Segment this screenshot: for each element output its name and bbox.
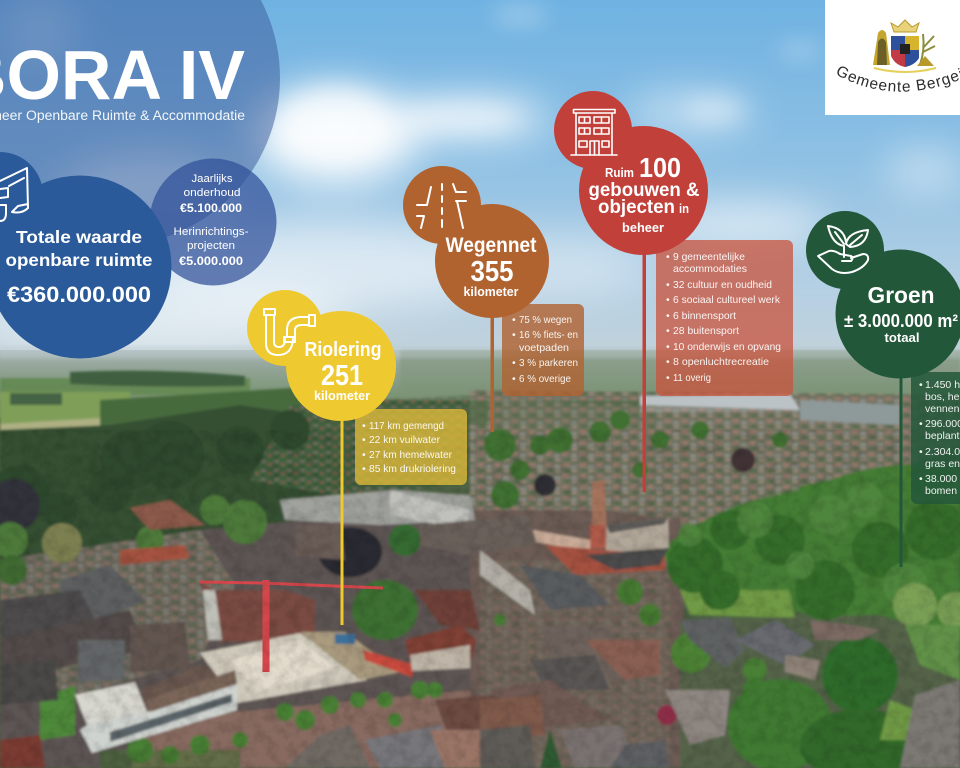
panel: gebouwen: [554, 91, 793, 492]
details box: 8 openluchtrecreatie: [673, 356, 769, 368]
panel: wegennet: kilometer: [464, 285, 519, 299]
details box: •: [362, 420, 366, 432]
panel: total value: €360.000.000: [7, 282, 151, 307]
details box: 11 overig: [673, 372, 711, 384]
details box: 28 buitensport: [673, 325, 739, 337]
details box: 6 sociaal cultureel werk: [673, 294, 781, 306]
details box: •: [919, 379, 923, 391]
details box: •: [919, 473, 923, 485]
panel: title: [0, 0, 280, 246]
buildings: [0, 480, 960, 768]
details box: 85 km drukriolering: [369, 463, 456, 475]
panel: yearly budgets: projecten: [187, 240, 235, 252]
pin line: [642, 250, 646, 492]
panel: wegennet: 355: [470, 256, 514, 288]
panel: wegennet: [403, 166, 584, 432]
icon: road: [417, 184, 466, 228]
pin line: [490, 310, 494, 432]
panel: total value: openbare ruimte: [6, 250, 153, 270]
panel: yearly budgets: €5.100.000: [180, 203, 242, 215]
tree masses: [0, 410, 960, 768]
details box: [355, 409, 467, 485]
panel: total value: [0, 152, 172, 358]
details box: •: [362, 434, 366, 446]
crest: [873, 20, 936, 72]
details box: 6 % overige: [519, 373, 571, 385]
panel: yearly budgets: €5.000.000: [179, 256, 243, 268]
panel: gebouwen: in: [679, 202, 689, 216]
details box: •: [666, 251, 670, 263]
panel: riolering: 251: [321, 360, 363, 392]
details box: [502, 304, 584, 396]
details box: •: [362, 463, 366, 475]
panel: gebouwen: gebouwen &: [588, 179, 700, 201]
panel: riolering: kilometer: [314, 389, 370, 403]
details box: •: [512, 373, 516, 385]
panel: gebouwen: objecten: [598, 196, 675, 218]
details box: bomen: [925, 485, 957, 497]
panel: wegennet: Wegennet: [446, 234, 536, 257]
panel: groen: totaal: [884, 331, 920, 345]
town roof texture: [0, 400, 800, 768]
panel: total value: Totale waarde: [16, 227, 142, 247]
details box: •: [666, 372, 670, 384]
panel: riolering: Riolering: [304, 339, 382, 361]
details box: [911, 372, 960, 504]
details box: 117 km gemengd: [369, 420, 444, 432]
details box: 10 onderwijs en opvang: [673, 341, 781, 353]
panel: yearly budgets: Jaarlijks: [192, 173, 233, 185]
logo: Gemeente Bergeijk: [825, 0, 960, 115]
details box: gras en: [925, 458, 960, 470]
pin line: [900, 375, 902, 567]
panel: groen: Groen: [868, 282, 934, 308]
details box: •: [666, 356, 670, 368]
crane: [200, 580, 383, 672]
details box: •: [666, 279, 670, 291]
panel: yearly budgets: Herinrichtings-: [174, 226, 249, 238]
details box: •: [666, 294, 670, 306]
details box: •: [666, 325, 670, 337]
panel: gebouwen: 100: [639, 152, 681, 183]
panel: yearly budgets: [150, 158, 276, 286]
details box: 6 binnensport: [673, 310, 736, 322]
details box: •: [512, 357, 516, 369]
panel: groen: [806, 211, 960, 567]
details box: •: [512, 329, 516, 341]
details box: [656, 240, 793, 396]
details box: 27 km hemelwater: [369, 449, 452, 461]
panel: gebouwen: beheer: [622, 221, 664, 235]
icon: pipe: [264, 309, 315, 355]
details box: •: [919, 446, 923, 458]
details box: 16 % fiets- en: [519, 329, 578, 341]
details box: 32 cultuur en oudheid: [673, 279, 772, 291]
details box: •: [512, 314, 516, 326]
details box: •: [362, 449, 366, 461]
icon: building: [571, 110, 617, 155]
details box: accommodaties: [673, 263, 747, 275]
pin line: [340, 410, 344, 625]
details box: voetpaden: [519, 342, 569, 354]
panel: riolering: [247, 290, 467, 625]
details box: vennen: [925, 403, 960, 415]
details box: •: [666, 341, 670, 353]
panel: gebouwen: Ruim: [605, 166, 634, 180]
icon: plant in hand: [818, 226, 868, 273]
municipality name: [835, 68, 960, 92]
panel: yearly budgets: onderhoud: [184, 187, 240, 199]
details box: 22 km vuilwater: [369, 434, 440, 446]
details box: •: [919, 418, 923, 430]
icon: public space: [0, 168, 28, 221]
details box: •: [666, 310, 670, 322]
details box: 75 % wegen: [519, 314, 572, 326]
details box: 9 gemeentelijke: [673, 251, 745, 263]
details box: 3 % parkeren: [519, 357, 578, 369]
